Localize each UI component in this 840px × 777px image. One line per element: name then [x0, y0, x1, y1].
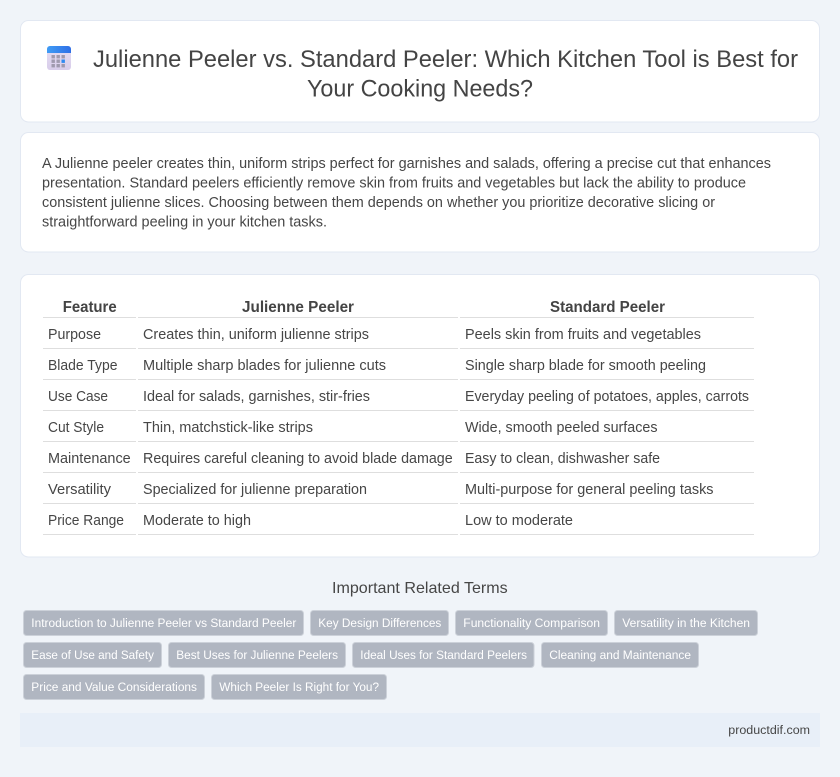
row: price range: Price Range [48, 513, 124, 529]
footer bar: productdif.com [728, 723, 810, 737]
tag [212, 674, 386, 700]
row: blade type: Blade Type [48, 358, 118, 374]
text block: summary paragraph: straightforward peeling in your kitchen tasks. [42, 214, 327, 230]
row: versatility [48, 482, 714, 498]
footer bar [20, 713, 820, 747]
table header row: Standard Peeler [550, 299, 665, 316]
tag: Ideal Uses for Standard Peelers [360, 648, 527, 662]
tag: Versatility in the Kitchen [622, 616, 750, 630]
tag: Functionality Comparison [463, 616, 600, 630]
row: blade type: Multiple sharp blades for julienne cuts [143, 358, 386, 374]
icon: calendar [47, 46, 71, 70]
row: price range: Low to moderate [465, 513, 573, 529]
tag [456, 610, 608, 636]
row: purpose [48, 327, 701, 343]
row: use case: Use Case [48, 389, 108, 405]
row: blade type: Single sharp blade for smooth peeling [465, 358, 706, 374]
table header row: Feature [63, 299, 117, 316]
row: cut style: Thin, matchstick-like strips [143, 420, 313, 436]
tag [24, 610, 304, 636]
row: maintenance: Easy to clean, dishwasher safe [465, 451, 660, 467]
row: maintenance [48, 451, 660, 467]
panel: introduction [20, 132, 820, 252]
tag [310, 610, 448, 636]
row: price range: Moderate to high [143, 513, 251, 529]
tag [24, 642, 162, 668]
row: purpose: Purpose [48, 327, 101, 343]
row: maintenance: Maintenance [48, 451, 131, 467]
text block: summary paragraph: presentation. Standard peelers efficiently remove skin from fruits and vegetables but lack the ability to produce [42, 176, 746, 192]
row: cut style [48, 420, 658, 436]
tag [614, 610, 758, 636]
tag: Introduction to Julienne Peeler vs Standard Peeler [31, 616, 296, 630]
row: blade type [48, 358, 706, 374]
tag: Ease of Use and Safety [31, 648, 155, 662]
heading [93, 46, 798, 102]
row: cut style: Wide, smooth peeled surfaces [465, 420, 658, 436]
heading: related terms: Important Related Terms [332, 580, 508, 597]
row: purpose: Peels skin from fruits and vegetables [465, 327, 701, 343]
tag: Best Uses for Julienne Peelers [176, 648, 338, 662]
row: versatility: Specialized for julienne preparation [143, 482, 367, 498]
row: maintenance: Requires careful cleaning to avoid blade damage [143, 451, 453, 467]
tag [542, 642, 698, 668]
table header row: Julienne Peeler [242, 299, 354, 316]
tag: Which Peeler Is Right for You? [219, 680, 379, 694]
tag: Price and Value Considerations [31, 680, 197, 694]
row: versatility: Versatility [48, 482, 112, 498]
text block: summary paragraph: A Julienne peeler creates thin, uniform strips perfect for garnishes and salads, offering a precise cut that enhances [42, 156, 771, 172]
tag: Cleaning and Maintenance [549, 648, 691, 662]
tag [24, 674, 204, 700]
heading: Julienne Peeler vs. Standard Peeler: Which Kitchen Tool is Best for [93, 46, 798, 73]
row: price range [48, 513, 573, 529]
row: versatility: Multi-purpose for general peeling tasks [465, 482, 714, 498]
row: purpose: Creates thin, uniform julienne strips [143, 327, 369, 343]
tag: Key Design Differences [318, 616, 441, 630]
row: use case [48, 389, 749, 405]
text block: summary paragraph: consistent julienne slices. Choosing between them depends on whether you prioritize decorative slicing or [42, 195, 715, 211]
row: use case: Ideal for salads, garnishes, stir-fries [143, 389, 370, 405]
panel: title card [20, 20, 820, 122]
text block: summary paragraph [42, 156, 771, 230]
panel: comparison table [20, 274, 820, 557]
heading: Your Cooking Needs? [307, 76, 533, 102]
tag list: related terms [24, 610, 758, 700]
row: use case: Everyday peeling of potatoes, apples, carrots [465, 389, 749, 405]
tag [352, 642, 534, 668]
row: cut style: Cut Style [48, 420, 104, 436]
table header row [63, 299, 665, 316]
tag [168, 642, 346, 668]
